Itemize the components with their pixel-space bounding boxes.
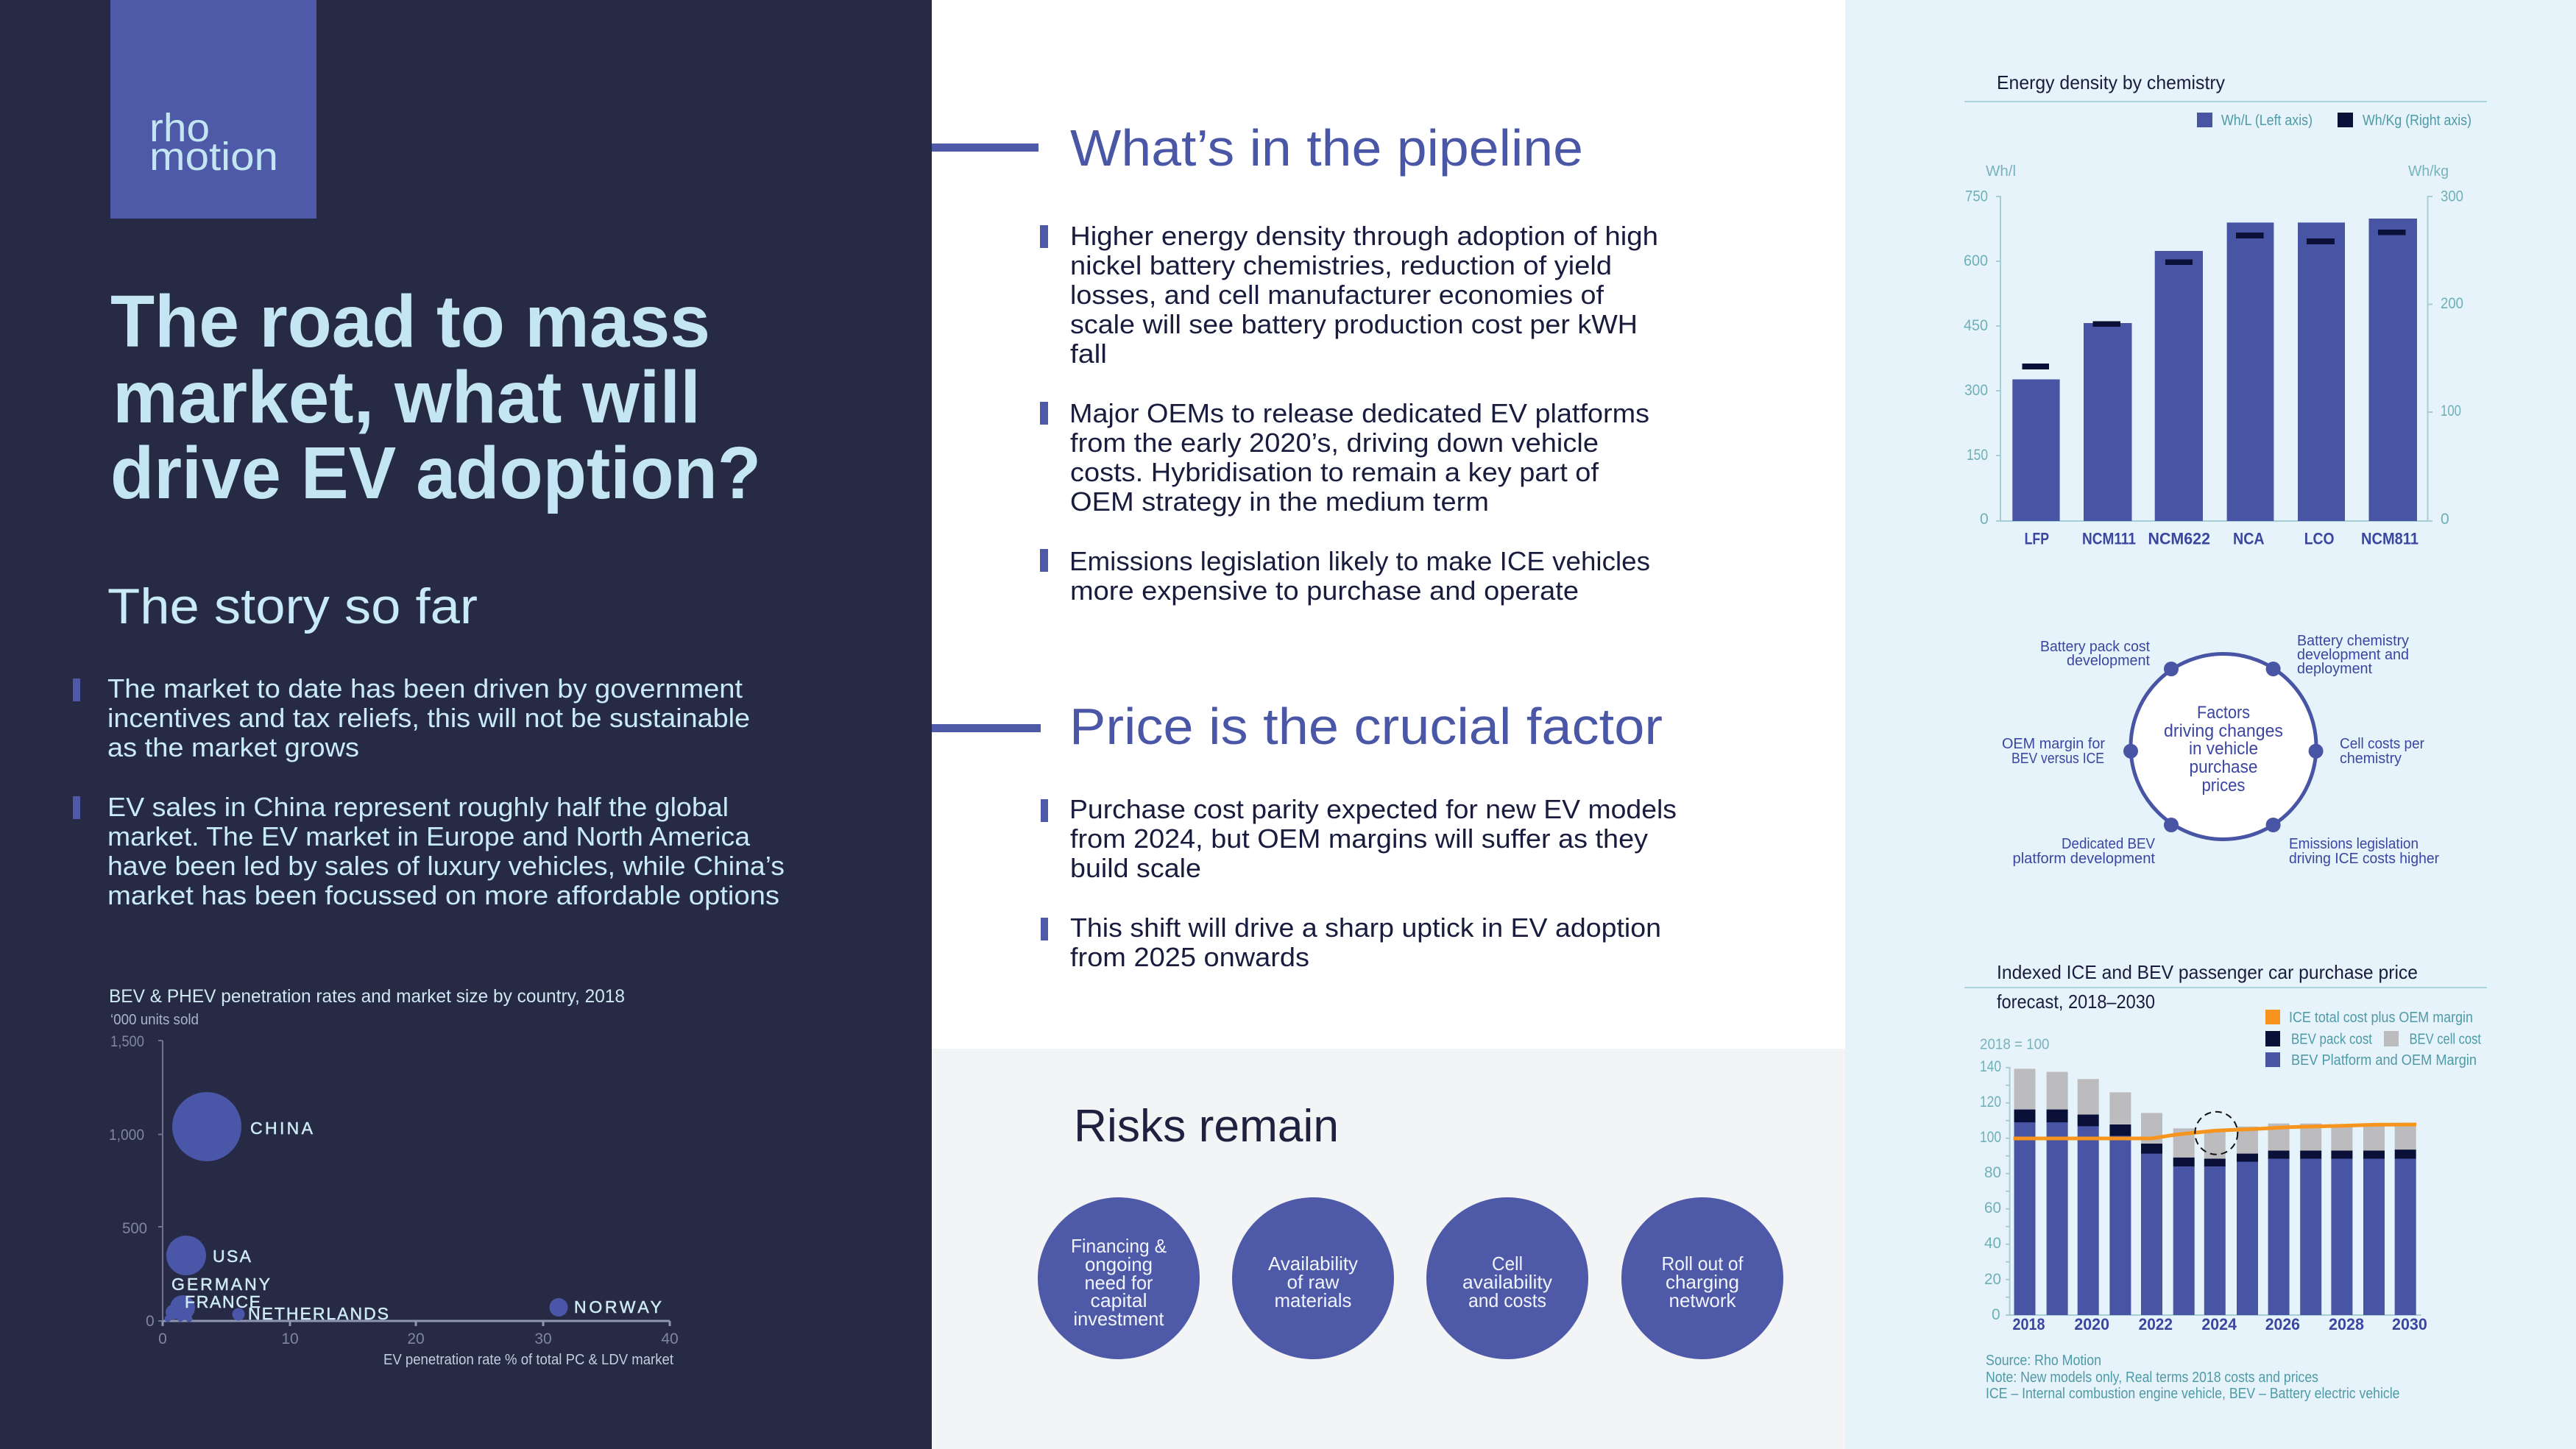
text block: pipeline bullet 3: more expensive to purchase and operate <box>1070 575 1579 606</box>
heading: the story so far: The story so far <box>107 578 478 634</box>
text block: story bullet 2: market has been focussed on more affordable options <box>107 880 779 910</box>
y axis labels: 140 <box>1980 1058 2001 1075</box>
risk circle: raw materials <box>1232 1197 1394 1359</box>
year labels <box>2012 1315 2427 1333</box>
right axis labels: 300 <box>2441 188 2463 205</box>
right axis labels: 100 <box>2441 403 2461 419</box>
legend <box>2197 113 2471 129</box>
factor labels: platform development <box>2012 851 2155 867</box>
source notes: Source: Rho Motion <box>1986 1353 2101 1369</box>
text block: price bullet 1: from 2024, but OEM margins will suffer as they <box>1070 823 1648 854</box>
y axis labels: 120 <box>1980 1094 2001 1110</box>
stacked bar chart: indexed purchase price <box>1964 961 2487 1402</box>
risk circle: cell availability: availability <box>1462 1271 1552 1293</box>
y axis labels: 1,500 <box>110 1033 144 1050</box>
left axis labels: 750 <box>1965 188 1988 205</box>
year labels: 2022 <box>2139 1315 2173 1333</box>
panel: left dark background <box>0 0 932 1449</box>
central text <box>2164 703 2283 796</box>
risk circle: cell availability: and costs <box>1468 1289 1546 1311</box>
central text: Factors <box>2197 703 2250 723</box>
risk circle: financing: need for <box>1085 1272 1153 1294</box>
source notes: Note: New models only, Real terms 2018 costs and prices <box>1986 1370 2318 1386</box>
ring nodes <box>2123 662 2324 832</box>
factor labels: BEV versus ICE <box>2011 751 2104 767</box>
platform and margin segments <box>2014 1122 2416 1315</box>
text block: pipeline bullet 2 <box>1040 398 1649 517</box>
logo block <box>110 0 316 219</box>
left axis labels <box>1964 188 1989 528</box>
legend: BEV Platform and OEM Margin <box>2291 1052 2477 1069</box>
legend <box>2265 1010 2481 1069</box>
factor labels: Battery chemistry <box>2297 633 2409 649</box>
factor labels: chemistry <box>2340 751 2402 767</box>
left axis labels: 150 <box>1967 447 1988 464</box>
factor labels: OEM margin for <box>2002 736 2105 752</box>
chart title: forecast, 2018–2030 <box>1997 991 2155 1013</box>
source notes: ICE – Internal combustion engine vehicle, BEV – Battery electric vehicle <box>1986 1386 2399 1402</box>
year labels: 2030 <box>2392 1315 2427 1333</box>
country labels: FRANCE <box>185 1292 261 1311</box>
left axis labels: 0 <box>1980 511 1989 528</box>
central text: driving changes <box>2164 721 2283 741</box>
legend: Wh/Kg (Right axis) <box>2363 113 2471 129</box>
text block: pipeline bullet 3 <box>1040 546 1650 606</box>
y axis labels: 100 <box>1980 1129 2001 1146</box>
text block: price bullet 1: build scale <box>1070 853 1201 883</box>
central text: prices <box>2202 776 2245 796</box>
chart title: Energy density by chemistry <box>1997 71 2225 93</box>
year labels: 2026 <box>2265 1315 2300 1333</box>
factor labels: development <box>2067 653 2150 669</box>
factor labels: driving ICE costs higher <box>2289 851 2439 867</box>
risk circle: cell availability: Cell <box>1492 1253 1523 1275</box>
y axis labels <box>1980 1058 2001 1323</box>
factor labels <box>2002 633 2439 867</box>
text block: story bullet 1 <box>73 673 750 762</box>
x axis title: EV penetration rate % of total PC & LDV market <box>383 1352 673 1368</box>
text block: story bullet 2: have been led by sales of luxury vehicles, while China’s <box>107 851 785 881</box>
bar chart: energy density by chemistry: Wh/kg <box>2408 163 2449 180</box>
legend: Wh/L (Left axis) <box>2221 113 2313 129</box>
pack cost segments <box>2014 1110 2416 1167</box>
factor labels: Cell costs per <box>2340 736 2424 752</box>
x axis labels: 10 <box>281 1331 299 1347</box>
legend: ICE total cost plus OEM margin <box>2289 1010 2473 1026</box>
category labels: LFP <box>2025 530 2049 548</box>
y axis labels: 20 <box>1984 1271 2001 1288</box>
x axis labels: 30 <box>534 1331 552 1347</box>
risk circle: financing: capital <box>1091 1289 1147 1311</box>
text block: pipeline bullet 1: Higher energy density through adoption of high <box>1070 221 1658 251</box>
text block: pipeline bullet 1: scale will see battery production cost per kWH <box>1070 309 1638 339</box>
text block: story bullet 2: EV sales in China represent roughly half the global <box>107 792 729 822</box>
diagram: factors driving vehicle prices <box>2002 633 2439 867</box>
text block: pipeline bullet 2: from the early 2020’s, driving down vehicle <box>1070 428 1599 458</box>
panel: right light blue <box>1845 0 2576 1449</box>
country labels: NORWAY <box>574 1297 662 1317</box>
right-axis markers <box>2023 230 2405 369</box>
text block: price bullet 2: from 2025 onwards <box>1070 942 1309 972</box>
bar chart: energy density by chemistry <box>1964 71 2487 548</box>
cell cost segments <box>2014 1069 2416 1158</box>
year labels: 2020 <box>2074 1315 2109 1333</box>
text block: pipeline bullet 1 <box>1040 221 1658 369</box>
text block: price bullet 2 <box>1041 913 1661 972</box>
chart title: BEV & PHEV penetration rates and market size by country, 2018 <box>109 986 625 1007</box>
panel: centre white <box>932 0 1845 1049</box>
factor labels: development and <box>2297 647 2409 663</box>
text block: pipeline bullet 3: Emissions legislation likely to make ICE vehicles <box>1069 546 1650 576</box>
y axis labels: 0 <box>146 1313 155 1330</box>
x axis labels: 20 <box>407 1331 425 1347</box>
heading: risks remain: Risks remain <box>1074 1101 1339 1152</box>
risk circle: charging network: network <box>1669 1289 1736 1311</box>
y axis labels <box>109 1033 155 1330</box>
right axis labels: 0 <box>2441 511 2449 528</box>
y axis labels: 60 <box>1984 1200 2001 1216</box>
category labels: NCM111 <box>2082 530 2136 548</box>
year labels: 2024 <box>2201 1315 2237 1333</box>
y axis labels: 500 <box>122 1220 147 1237</box>
category labels: NCM811 <box>2361 530 2418 548</box>
text block: pipeline bullet 1: losses, and cell manufacturer economies of <box>1070 280 1604 310</box>
y unit: ‘000 units sold <box>110 1012 199 1028</box>
heading: what's in the pipeline: What’s in the pipeline <box>1070 119 1583 177</box>
risk circle: raw materials: Availability <box>1268 1253 1358 1275</box>
text block: story bullet 1: The market to date has been driven by government <box>107 673 743 704</box>
year labels: 2028 <box>2329 1315 2364 1333</box>
country labels: NETHERLANDS <box>248 1304 389 1323</box>
main title <box>110 280 761 514</box>
logo block: motion <box>149 135 278 179</box>
text block: pipeline bullet 2: costs. Hybridisation to remain a key part of <box>1070 457 1599 487</box>
factor labels: Dedicated BEV <box>2062 836 2156 852</box>
text block: pipeline bullet 2: OEM strategy in the medium term <box>1070 486 1489 517</box>
category labels <box>2025 530 2418 548</box>
category labels: NCM622 <box>2148 530 2210 548</box>
risk circle: raw materials: of raw <box>1287 1271 1340 1293</box>
category labels: NCA <box>2233 530 2265 548</box>
text block: story bullet 2 <box>73 792 785 910</box>
central text: purchase <box>2189 757 2258 777</box>
y axis labels: 40 <box>1984 1235 2001 1252</box>
text block: pipeline bullet 2: Major OEMs to release dedicated EV platforms <box>1069 398 1649 428</box>
risk circle: charging network: charging <box>1666 1271 1739 1293</box>
y axis labels: 0 <box>1992 1306 2000 1323</box>
y axis labels: 80 <box>1984 1164 2001 1181</box>
heading: price is the crucial factor: Price is the crucial factor <box>1069 698 1663 755</box>
text block: price bullet 1 <box>1041 794 1677 883</box>
y axis labels: 1,000 <box>109 1127 144 1144</box>
chart title: Indexed ICE and BEV passenger car purchase price <box>1997 961 2418 983</box>
dashed parity marker <box>2195 1112 2237 1155</box>
risk circle: financing: investment <box>1073 1308 1164 1330</box>
left axis labels: 450 <box>1964 317 1988 334</box>
chart title <box>1997 961 2418 1013</box>
risk circle: charging network: Roll out of <box>1662 1253 1744 1275</box>
text block: pipeline bullet 1: nickel battery chemistries, reduction of yield <box>1070 250 1612 280</box>
x axis labels: 40 <box>661 1331 679 1347</box>
ICE cost line <box>2014 1124 2416 1138</box>
risk circle: raw materials: materials <box>1275 1289 1351 1311</box>
factor labels: Emissions legislation <box>2289 836 2418 852</box>
risk circle: financing: Financing & <box>1071 1235 1167 1257</box>
stacked bar chart: indexed purchase price: 2018 = 100 <box>1980 1036 2049 1052</box>
text block: price bullet 1: Purchase cost parity expected for new EV models <box>1069 794 1677 824</box>
panel: risks remain <box>932 1049 1845 1449</box>
central ring <box>2131 653 2316 839</box>
logo block: rho <box>149 106 210 150</box>
year labels: 2018 <box>2012 1315 2045 1333</box>
central text: in vehicle <box>2189 739 2258 759</box>
source notes <box>1986 1353 2399 1402</box>
risk circle: cell availability <box>1426 1197 1588 1359</box>
factor labels: deployment <box>2297 661 2372 677</box>
left axis labels: 600 <box>1964 252 1988 269</box>
text block: story bullet 2: market. The EV market in Europe and North America <box>107 821 751 851</box>
bubbles <box>165 1092 568 1322</box>
country labels: CHINA <box>250 1119 314 1138</box>
text block: story bullet 1: as the market grows <box>107 732 359 762</box>
text block: pipeline bullet 1: fall <box>1070 339 1107 369</box>
text block: story bullet 1: incentives and tax reliefs, this will not be sustainable <box>107 703 750 733</box>
main title: drive EV adoption? <box>110 432 761 514</box>
country labels <box>171 1119 662 1323</box>
main title: The road to mass <box>110 280 710 363</box>
legend: BEV cell cost <box>2410 1032 2481 1048</box>
bars <box>2012 219 2417 521</box>
risk circle: charging network <box>1621 1197 1783 1359</box>
category labels: LCO <box>2304 530 2335 548</box>
text block: price bullet 2: This shift will drive a sharp uptick in EV adoption <box>1070 913 1661 943</box>
factor labels: Battery pack cost <box>2040 639 2150 655</box>
right axis labels <box>2441 188 2463 528</box>
legend: BEV pack cost <box>2291 1032 2372 1048</box>
x axis labels: 0 <box>158 1331 167 1347</box>
main title: market, what will <box>113 356 701 439</box>
x axis labels <box>158 1331 679 1347</box>
right axis labels: 200 <box>2441 295 2463 312</box>
risk circle: financing <box>1038 1197 1200 1359</box>
bar chart: energy density by chemistry: Wh/l <box>1986 163 2016 180</box>
left axis labels: 300 <box>1964 382 1988 399</box>
country labels: GERMANY <box>171 1275 270 1294</box>
country labels: USA <box>213 1247 252 1266</box>
risk circle: financing: ongoing <box>1085 1253 1153 1275</box>
bubble chart: penetration and market size <box>109 986 679 1368</box>
